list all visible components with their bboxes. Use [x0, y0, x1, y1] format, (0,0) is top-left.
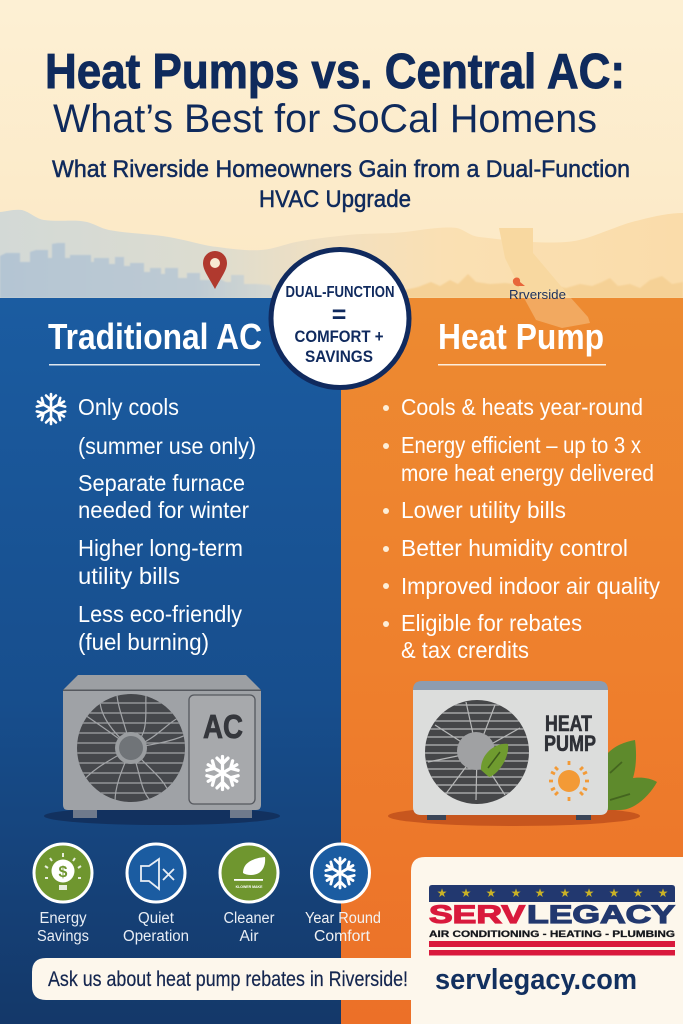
- subtitle: HVAC Upgrade: [259, 186, 411, 213]
- feature: cleaner air: Cleaner: [224, 910, 274, 927]
- feature: year round comfort: Year Round: [305, 910, 381, 927]
- text block: traditional AC list: (fuel burning): [78, 629, 209, 655]
- callout: dual-function badge: DUAL-FUNCTION: [286, 284, 394, 301]
- landscape: mountains and skyline: [0, 210, 683, 300]
- logo: ServLegacy: [429, 885, 675, 956]
- logo: ServLegacy: ★: [437, 886, 447, 900]
- text block: heat pump list: Lower utility bills: [401, 497, 566, 523]
- text block: traditional AC list: Higher long-term: [78, 535, 243, 561]
- subtitle: What Riverside Homeowners Gain from a Dual-Function: [52, 156, 630, 183]
- title: [45, 45, 625, 141]
- text block: traditional AC list: [78, 394, 256, 655]
- website link: servlegacy.com: [435, 964, 637, 996]
- feature: energy savings: Energy: [40, 910, 87, 927]
- illustration: AC unit: AC: [203, 708, 243, 745]
- text block: heat pump list: & tax crerdits: [401, 637, 529, 663]
- right treeline: [405, 274, 683, 298]
- logo: ServLegacy: ★: [511, 886, 521, 900]
- heading: Heat Pump: Heat Pump: [438, 316, 604, 357]
- callout: dual-function badge: SAVINGS: [305, 348, 373, 366]
- feature: year round comfort: [305, 844, 381, 945]
- icon: Riverside marker: [513, 278, 525, 286]
- feature: cleaner air: Air: [240, 928, 258, 945]
- icon: sun: [549, 761, 589, 801]
- icon: side leaves: [606, 740, 657, 810]
- illustration: AC unit: [44, 675, 280, 825]
- text block: heat pump list: Better humidity control: [401, 535, 628, 561]
- text block: heat pump list: [383, 394, 660, 663]
- illustration: heat pump unit: [388, 681, 657, 826]
- logo: ServLegacy: LEGACY: [527, 901, 675, 929]
- title: What’s Best for SoCal Homens: [53, 97, 597, 141]
- panel: logo card: [411, 857, 683, 1024]
- text block: traditional AC list: (summer use only): [78, 433, 256, 459]
- feature: energy savings: Savings: [37, 928, 89, 945]
- panel: traditional AC background: [0, 298, 341, 1024]
- icon: location pin: [203, 251, 227, 289]
- text block: traditional AC list: Only cools: [78, 394, 179, 420]
- California map shape: [499, 228, 590, 328]
- logo: ServLegacy: ★: [584, 886, 594, 900]
- callout: dual-function badge: =: [332, 301, 346, 329]
- feature: quiet operation: [123, 844, 189, 945]
- icon: fan leaf: [481, 744, 508, 777]
- panel: heat pump background: [341, 298, 683, 1024]
- logo: ServLegacy: ★: [560, 886, 570, 900]
- text block: traditional AC list: utility bills: [78, 563, 180, 589]
- text block: heat pump list: more heat energy delivered: [401, 460, 654, 486]
- feature: cleaner air: KLOWER MAKE: [236, 885, 263, 889]
- logo: ServLegacy: ★: [535, 886, 545, 900]
- callout: rebate pill: [32, 958, 411, 1000]
- background sky: [0, 0, 683, 300]
- subtitle: [52, 156, 630, 213]
- text block: heat pump list: Cools & heats year-round: [401, 394, 643, 420]
- feature: quiet operation: Operation: [123, 928, 189, 945]
- Riverside label: Rrverside: [509, 287, 566, 302]
- logo: ServLegacy: ★: [609, 886, 619, 900]
- icon: list snowflake: [36, 394, 66, 424]
- text block: heat pump list: Improved indoor air quality: [401, 573, 660, 599]
- skyline silhouette: [0, 243, 278, 298]
- illustration: heat pump unit: PUMP: [544, 731, 596, 756]
- heading: Traditional AC: Traditional AC: [48, 316, 262, 357]
- text block: traditional AC list: Separate furnace: [78, 470, 245, 496]
- feature: cleaner air: [220, 844, 278, 945]
- text block: heat pump list: Energy efficient – up to 3 x: [401, 432, 641, 458]
- callout: dual-function badge: COMFORT +: [294, 328, 384, 346]
- text block: heat pump list: Eligible for rebates: [401, 610, 582, 636]
- logo: ServLegacy: ★: [633, 886, 643, 900]
- illustration: heat pump unit: HEAT: [545, 711, 592, 736]
- logo: ServLegacy: ★: [461, 886, 471, 900]
- logo: ServLegacy: SERV: [429, 901, 525, 929]
- callout: dual-function badge: [271, 250, 409, 388]
- feature: year round comfort: Comfort: [314, 928, 371, 945]
- feature: energy savings: $: [59, 864, 68, 881]
- logo: ServLegacy: ★: [658, 886, 668, 900]
- feature: energy savings: [34, 844, 92, 945]
- callout: rebate pill: Ask us about heat pump rebates in Riverside!: [48, 968, 408, 991]
- feature: quiet operation: Quiet: [138, 910, 175, 927]
- text block: traditional AC list: Less eco-friendly: [78, 601, 242, 627]
- logo: ServLegacy: ★: [486, 886, 496, 900]
- text block: traditional AC list: needed for winter: [78, 497, 249, 523]
- title: Heat Pumps vs. Central AC:: [45, 45, 625, 99]
- logo: ServLegacy: AIR CONDITIONING - HEATING - PLUMBING: [429, 929, 675, 939]
